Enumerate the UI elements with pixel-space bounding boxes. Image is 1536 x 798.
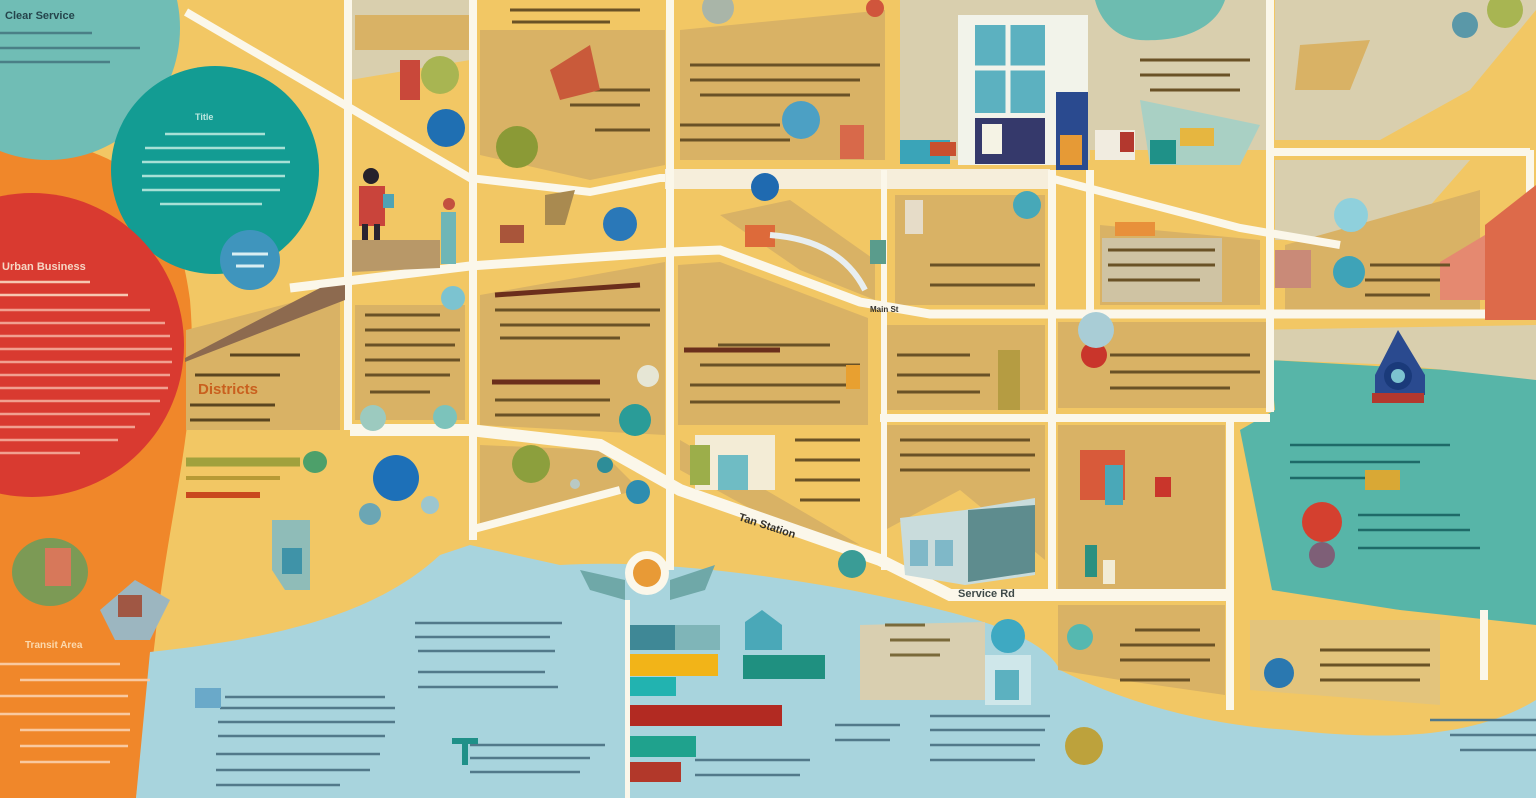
right teal text	[1290, 445, 1480, 548]
large teal circle panel	[111, 66, 319, 290]
block text left panel	[190, 355, 300, 420]
bar chart	[625, 600, 825, 798]
heading: orange district: Districts	[198, 381, 258, 398]
beige north east land	[350, 0, 1536, 380]
top-left teal circle panel	[0, 0, 180, 160]
water text blocks	[216, 623, 1536, 785]
road name label three: Main St	[870, 305, 899, 314]
icon: chart house	[745, 610, 782, 650]
road name label: Tan Station	[737, 511, 797, 541]
red house	[1440, 185, 1536, 320]
lighthouse marker	[580, 551, 715, 600]
icon: teal circle badge	[220, 230, 280, 290]
mixed icons	[272, 45, 1400, 590]
small pink house	[1275, 250, 1311, 288]
sea area: right teal	[1240, 360, 1536, 625]
icon: beige note panel	[860, 622, 985, 700]
person figure 2	[441, 198, 456, 264]
grey-beige notice panel	[1102, 238, 1222, 302]
person figure	[359, 168, 394, 246]
left sea text block: Transit Area	[25, 640, 83, 651]
teal top bubble	[1095, 0, 1225, 40]
white roads	[186, 0, 1530, 710]
red circle panel	[0, 193, 184, 497]
ground shadow	[352, 240, 440, 272]
left sea text block	[0, 640, 150, 762]
brown trail	[185, 285, 345, 362]
street clutter	[1095, 100, 1260, 165]
label text in beige note	[885, 625, 950, 655]
heading: red circle: Urban Business	[2, 261, 86, 273]
orange coastal band	[0, 130, 192, 798]
dark accent lines	[492, 285, 780, 382]
teal T icon	[452, 738, 478, 765]
sea area: bottom water	[136, 545, 1536, 798]
blue tower marker	[1372, 330, 1425, 403]
tan city blocks	[186, 10, 1480, 705]
central small building	[690, 435, 775, 490]
white kiosk building	[985, 655, 1031, 705]
heading: teal circle: Title	[195, 112, 213, 122]
road name label two: Service Rd	[958, 588, 1015, 600]
tall building illustration	[900, 15, 1088, 170]
heading: top left: Clear Service	[5, 10, 75, 22]
map pins	[359, 0, 1523, 765]
office building illustration	[900, 498, 1035, 585]
illustration: houses at left	[12, 538, 170, 640]
text lines in tan blocks	[365, 10, 1450, 680]
green and orange labels	[186, 451, 327, 495]
small icon in water	[195, 688, 221, 708]
